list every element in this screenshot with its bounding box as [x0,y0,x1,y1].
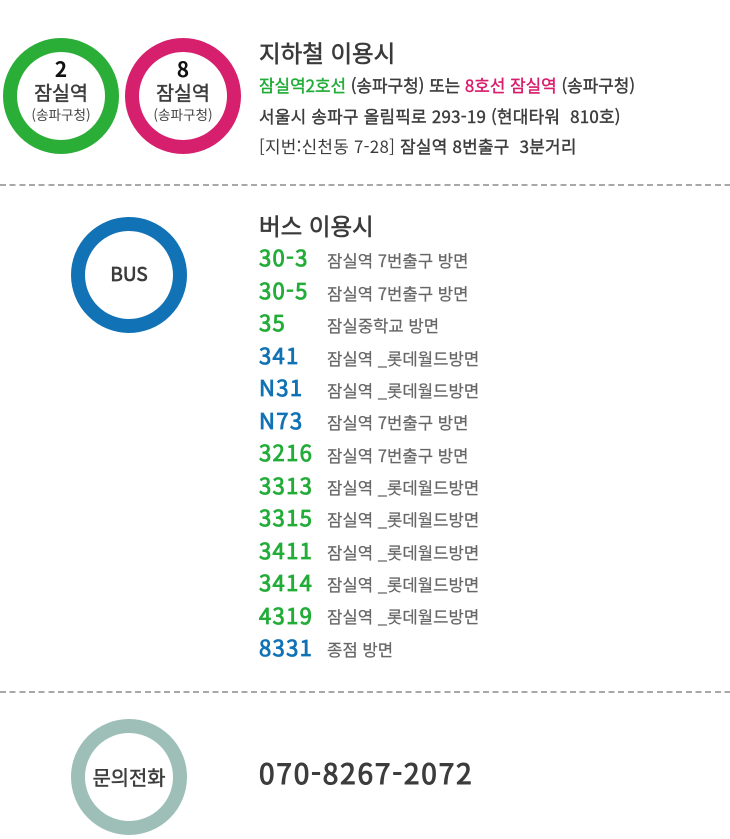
route 3411: 3411 [259,534,313,566]
route 341: 341 [259,339,300,371]
icon: line 8 station badge: 잠실역 [156,77,210,106]
route 3315 [259,501,479,533]
text: subway lines: 잠실역2호선 (송파구청) 또는 8호선 잠실역 (송파구청) [259,72,635,97]
route 4319 [259,599,479,631]
route 3315: 잠실역 _롯데월드방면 [327,507,479,531]
bus route list [259,241,479,663]
route 35: 잠실중학교 방면 [327,313,439,337]
route 30-3 [259,241,468,273]
route 8331: 8331 [259,631,313,663]
route 30-5 [259,274,468,306]
route N73 [259,404,468,436]
icon: bus badge: BUS [110,260,148,287]
route 3411 [259,534,479,566]
route 4319: 잠실역 _롯데월드방면 [327,604,479,628]
route 30-3: 30-3 [259,241,309,273]
route 3414: 3414 [259,566,313,598]
route 3411: 잠실역 _롯데월드방면 [327,540,479,564]
route N31: N31 [259,371,303,403]
route 3216 [259,436,468,468]
route 30-5: 30-5 [259,274,309,306]
route 341: 잠실역 _롯데월드방면 [327,346,479,370]
route 35 [259,306,439,338]
icon: line 2 station badge: (송파구청) [31,104,91,124]
text: address: 서울시 송파구 올림픽로 293-19 (현대타워 810호) [259,103,621,128]
route N31: 잠실역 _롯데월드방면 [327,378,479,402]
route 3414 [259,566,479,598]
icon: line 8 station badge [125,38,241,154]
route 3315: 3315 [259,501,313,533]
route 8331 [259,631,393,663]
route 35: 35 [259,306,286,338]
text: phone number: 070-8267-2072 [259,753,473,793]
icon: phone inquiry badge [71,719,187,835]
route 3313 [259,469,479,501]
route 3313: 잠실역 _롯데월드방면 [327,475,479,499]
icon: line 2 station badge: 2 [55,54,67,84]
route 4319: 4319 [259,599,313,631]
route 3414: 잠실역 _롯데월드방면 [327,572,479,596]
icon: bus badge [71,217,187,333]
route N73: 잠실역 7번출구 방면 [327,410,468,434]
route 3313: 3313 [259,469,313,501]
route N31 [259,371,479,403]
route 30-5: 잠실역 7번출구 방면 [327,281,468,305]
route N73: N73 [259,404,303,436]
text: lot address and exit: [지번:신천동 7-28] 잠실역 8번출구 3분거리 [259,133,577,158]
route 3216: 3216 [259,436,313,468]
route 8331: 종점 방면 [327,637,393,661]
icon: phone inquiry badge: 문의전화 [93,762,165,791]
route 3216: 잠실역 7번출구 방면 [327,443,468,467]
icon: line 2 station badge [3,38,119,154]
heading: bus: 버스 이용시 [259,208,374,242]
route 341 [259,339,479,371]
heading: subway: 지하철 이용시 [259,35,395,69]
route 30-3: 잠실역 7번출구 방면 [327,248,468,272]
icon: line 2 station badge: 잠실역 [34,77,88,106]
icon: line 8 station badge: 8 [177,54,189,84]
icon: line 8 station badge: (송파구청) [153,104,213,124]
